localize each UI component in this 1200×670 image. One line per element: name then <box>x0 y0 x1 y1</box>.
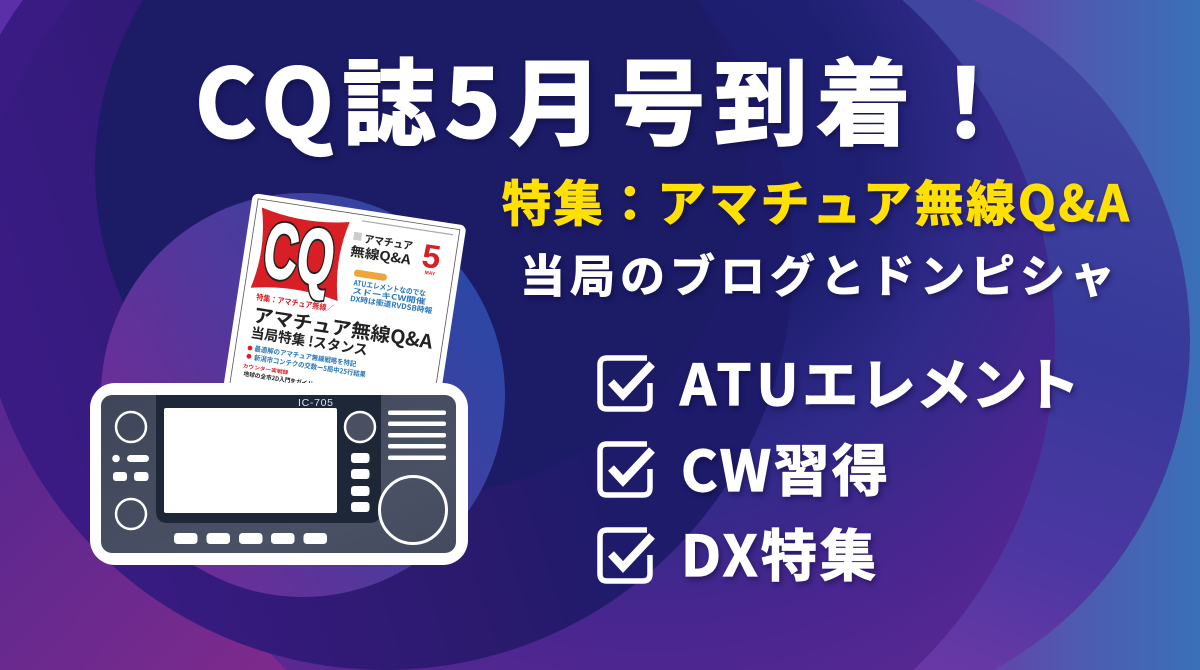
subtitle: white: 当局のブログとドンピシャ <box>520 240 1120 305</box>
magazine cover: アマチュア無線Q&A <box>252 301 436 355</box>
magazine cover: 無線Q&A <box>349 241 413 269</box>
checklist <box>600 341 1077 593</box>
CQ logo: CQ <box>258 205 341 302</box>
magazine cover: 地球の全市2D入門をガイド <box>243 369 314 388</box>
magazine cover: アマチュア <box>363 231 414 254</box>
magazine cover: 新潟市コンテクの交数ー5局中25行結果 <box>253 353 367 380</box>
right buttons <box>351 453 370 512</box>
item 2: CW習得 <box>681 427 888 508</box>
CQ logo <box>249 204 350 304</box>
magazine heading <box>353 232 362 241</box>
bottom buttons <box>174 533 327 544</box>
display bezel <box>156 395 381 523</box>
magazine cover: MAY <box>424 270 436 278</box>
magazine cover: 最適解のアマチュア無線戦略を特記 <box>254 344 357 370</box>
screen <box>164 408 337 513</box>
CQ logo: CQ <box>258 205 341 302</box>
subtitle: yellow: 特集：アマチュア無線Q&A <box>502 165 1132 236</box>
knobs <box>116 412 446 544</box>
title: CQ誌5月号到着！ <box>195 29 1021 165</box>
left buttons <box>112 455 149 481</box>
model label: IC-705 <box>298 397 333 409</box>
blue teasers: DX時は衝道RVDSB時報 <box>349 293 434 316</box>
icon: checkbox 1 <box>600 358 652 409</box>
speaker lines <box>388 410 446 460</box>
magazine cover: カウンター実戦録 <box>242 362 289 376</box>
main headline: 特集：アマチュア無線／ <box>255 292 334 314</box>
blue teasers: ATUエレメントなのでな <box>352 277 427 299</box>
magazine cover: 当局特集 !スタンス <box>249 322 369 360</box>
item 1: ATUエレメント <box>679 341 1077 422</box>
icon: checkbox 2 <box>600 444 652 495</box>
icon: checkbox 3 <box>600 530 652 581</box>
blue teasers <box>349 269 437 316</box>
issue number: 5 <box>420 237 443 276</box>
magazine cover <box>217 193 467 463</box>
radio: IC-705 <box>90 383 468 565</box>
blue teasers: スドーキCW開催 <box>352 285 427 307</box>
item 3: DX特集 <box>681 512 876 593</box>
